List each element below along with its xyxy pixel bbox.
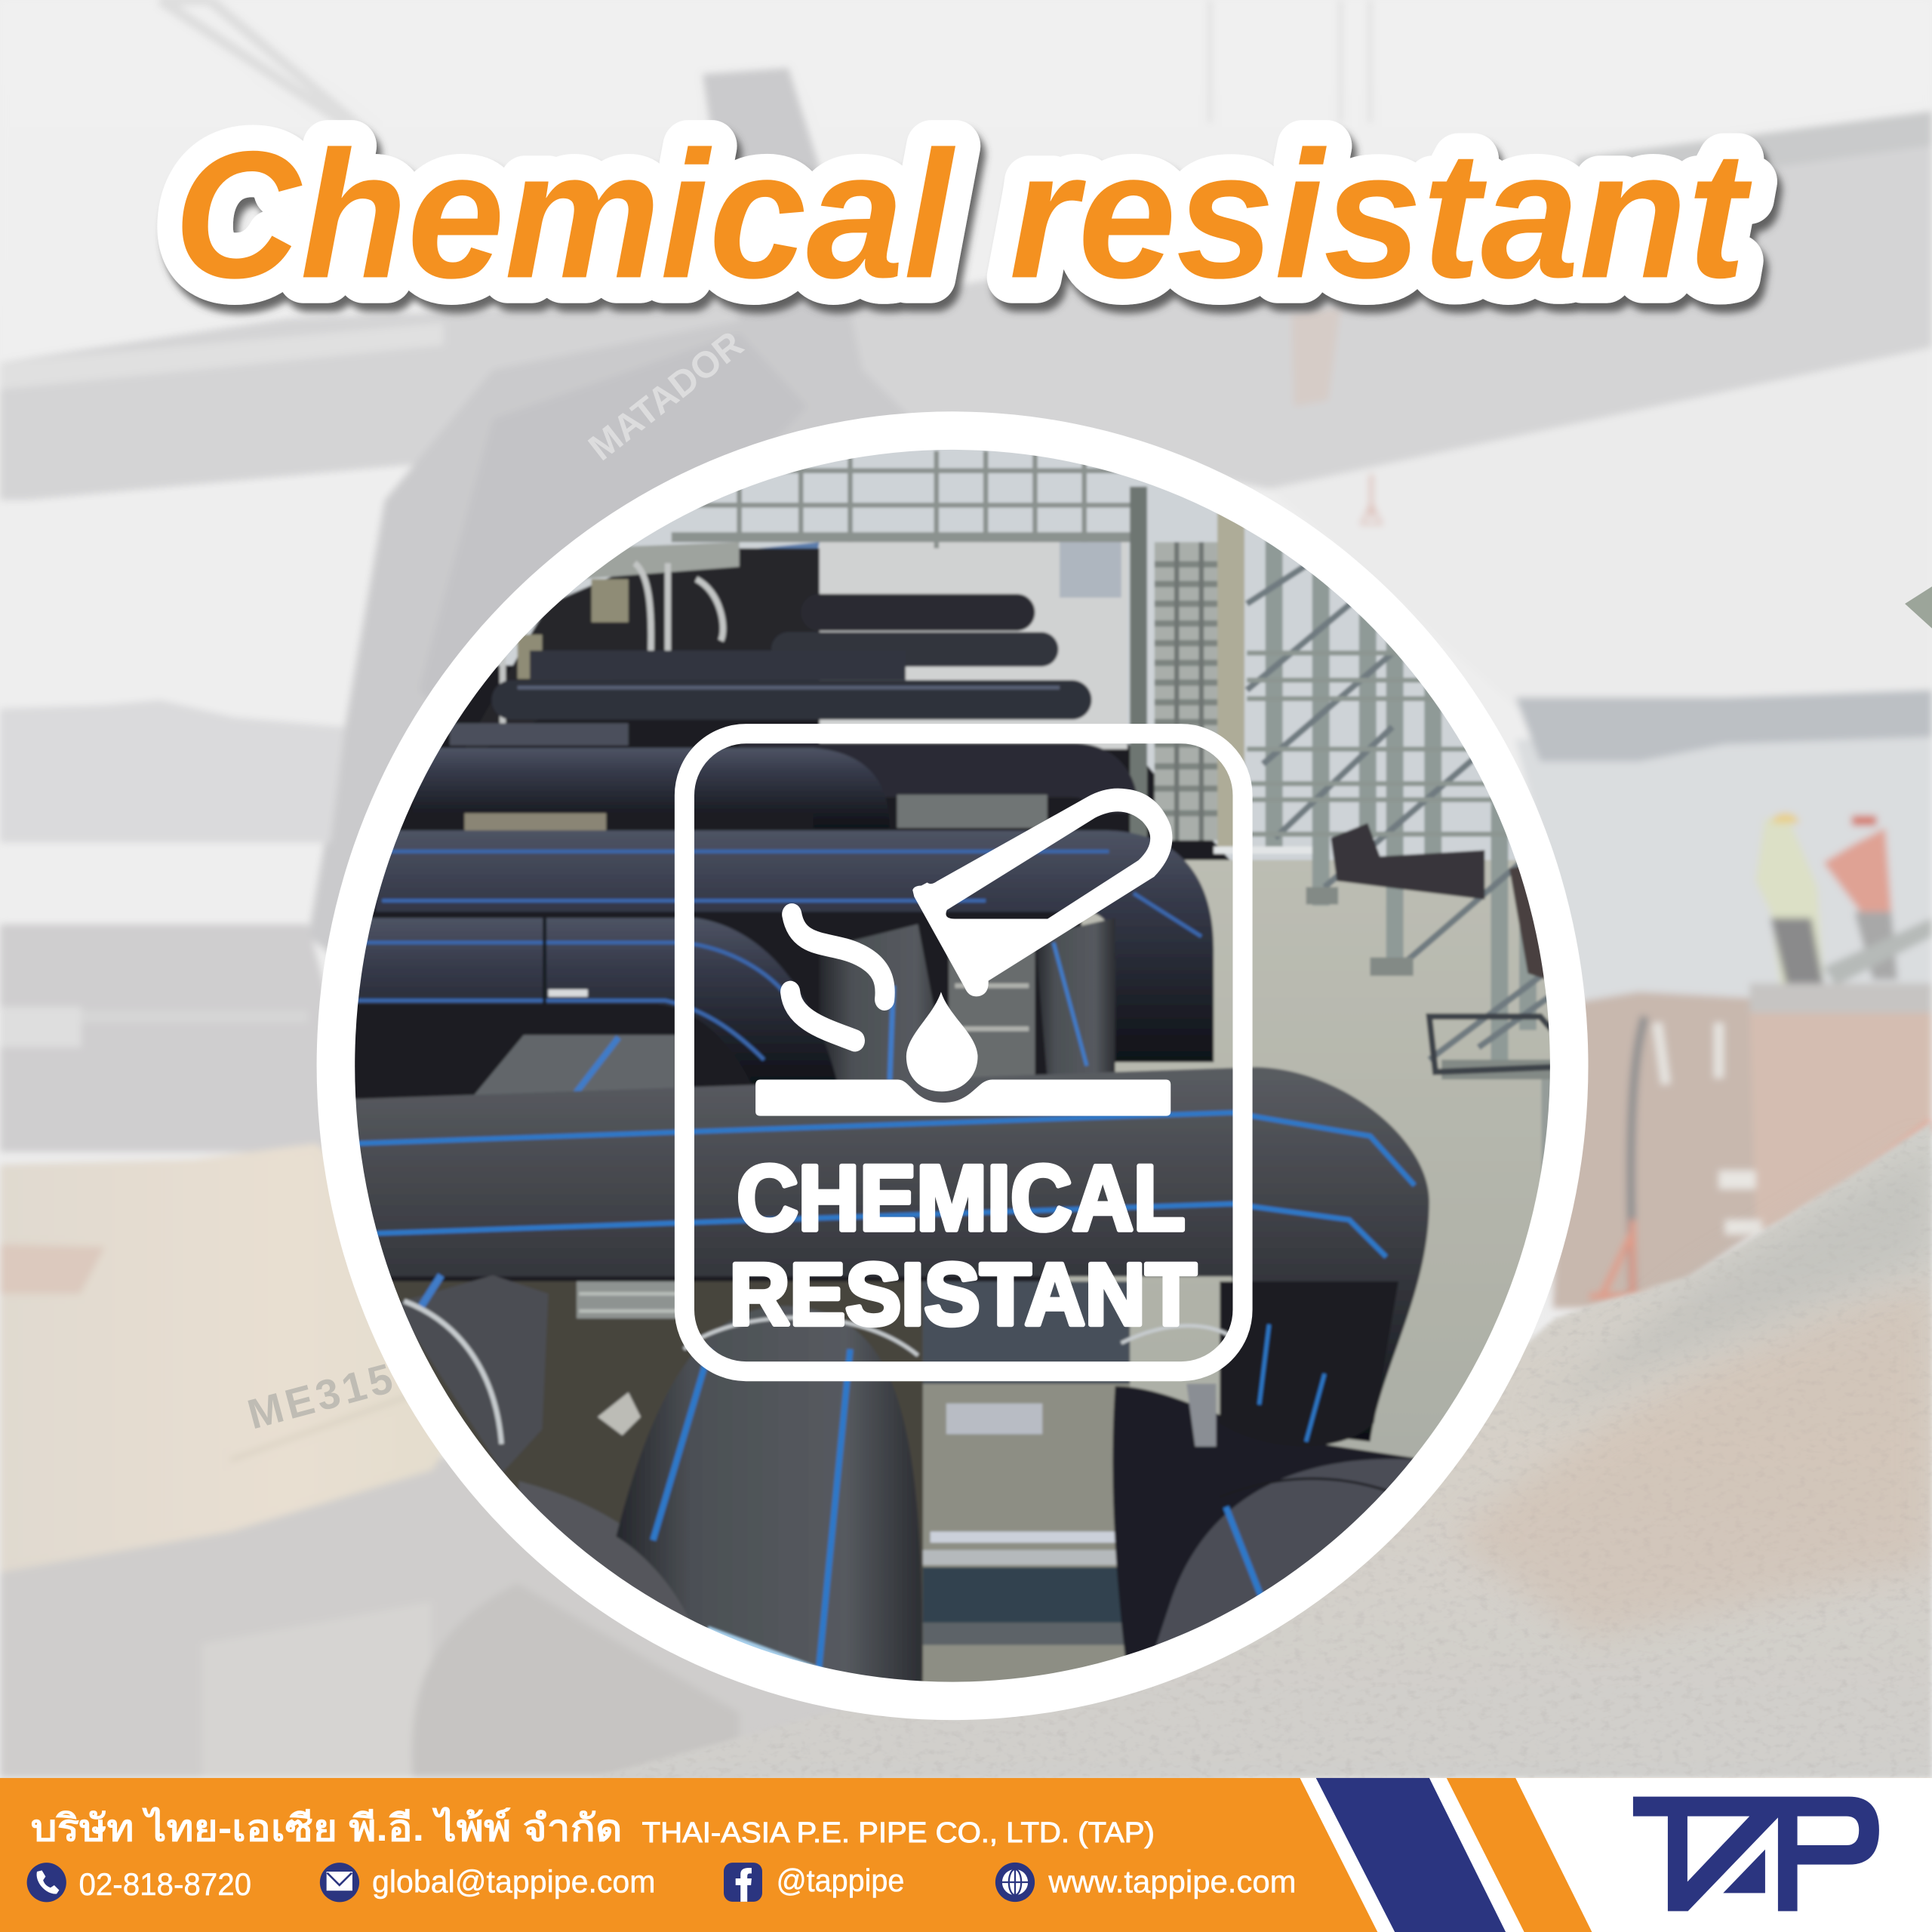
gravel gray band: [1527, 1146, 1932, 1417]
badge text: resistant: RESISTANT: [730, 1245, 1196, 1343]
title outline with shadow: resistant: [1009, 113, 1752, 315]
scaffold group: [1139, 487, 1577, 1306]
icon: facebook: [724, 1863, 762, 1902]
photo base: sky: [345, 444, 1564, 1688]
lower right pipe tee: [1112, 1386, 1437, 1675]
excavator arm centre: [308, 68, 912, 986]
footer band: [0, 1778, 1932, 1932]
logo: TAP: [1633, 1797, 1879, 1911]
pipe row three: [376, 830, 1214, 1062]
sky opening: [820, 540, 1128, 749]
top-left dark platform: [456, 549, 820, 764]
walkway railing: [672, 451, 1140, 549]
icon: globe: [995, 1863, 1035, 1902]
right sky: [1269, 347, 1932, 709]
right water: [1515, 727, 1932, 1004]
email address: global@tappipe.com: [372, 1864, 656, 1900]
red hose: [1811, 1124, 1932, 1214]
columns: [1274, 530, 1527, 1060]
footer white stripes: [1300, 1778, 1524, 1932]
pipe bottom left small: [518, 1481, 709, 1688]
excavator yellow body: [0, 1143, 442, 1571]
website: www.tappipe.com: [1048, 1864, 1297, 1900]
pipe row four: [355, 918, 838, 1084]
pipe row two: [413, 748, 890, 828]
excavator brand: MATADOR: [581, 324, 751, 469]
platform top: [1749, 983, 1932, 1018]
icon: pouring beaker: [912, 789, 1172, 996]
leaf at right edge: [1905, 586, 1932, 629]
gap structure: [923, 1281, 1130, 1688]
vertical elbow base: [1220, 1281, 1398, 1446]
badge text: chemical: CHEMICAL: [737, 1146, 1186, 1249]
circle photo frame: [317, 411, 1588, 1720]
left treeline: [0, 700, 345, 843]
silver rails: [503, 563, 723, 727]
footer orange bar: [0, 1778, 1932, 1932]
pipe row two back: [740, 770, 1112, 814]
excavator label: ME315: [243, 1354, 401, 1438]
icon: phone: [27, 1863, 66, 1902]
workers: [1756, 814, 1823, 986]
footer navy stripe: [1316, 1778, 1506, 1932]
title fill: Chemical: [174, 113, 955, 315]
icon: drop: [906, 992, 978, 1091]
hook: [1291, 308, 1340, 407]
cables: [1210, 0, 1371, 123]
company name thai: บริษัท ไทย-เอเซีย พี.อี. ไพ้พ์ จำกัด: [31, 1806, 622, 1849]
large centre vertical pipe: [616, 1306, 922, 1688]
footer white logo area: [1515, 1778, 1932, 1932]
far pipes: [820, 601, 1017, 623]
crane lattice top left: [159, 0, 363, 122]
rail and debris: [1214, 847, 1312, 854]
panel: pipeline photo: [345, 444, 1583, 1688]
braces: [1247, 518, 1577, 1060]
gravel slope: [592, 1121, 1932, 1778]
centre gray pipes: [820, 924, 949, 1084]
light blue corner: [690, 1626, 835, 1688]
icon: splash curves: [790, 915, 885, 1041]
excavator cab: [0, 922, 323, 1155]
machine by wall: [1552, 992, 1756, 1309]
title fill: resistant: [1009, 113, 1752, 315]
machinery behind: [949, 949, 1035, 1084]
left sky window: [0, 500, 384, 927]
pipe lower left: [394, 1275, 549, 1472]
title: Chemical resistant: [174, 113, 1752, 315]
phone number: 02-818-8720: [78, 1866, 251, 1902]
horizontals: [1247, 653, 1552, 834]
icon: mail: [320, 1863, 359, 1902]
floor: [1048, 860, 1564, 1688]
lower-left gray base: [0, 1455, 842, 1778]
light arc: [1121, 1326, 1232, 1343]
big pipe elbow: [351, 1067, 1429, 1441]
big pipe blue stripes: [357, 1112, 1414, 1257]
title fill: [174, 113, 1752, 315]
tracks bottom left: [202, 1601, 431, 1778]
title outline with shadow: [174, 113, 1752, 315]
blue tarp: [758, 542, 820, 635]
pink wall right: [1749, 1013, 1932, 1238]
stair tower grid: [1155, 542, 1225, 840]
bridge deck: [0, 111, 1932, 503]
gray diagonal pipe: [471, 1035, 675, 1099]
company name english: THAI-ASIA P.E. PIPE CO., LTD. (TAP): [642, 1817, 1155, 1848]
icon: surface plate: [755, 1079, 1171, 1116]
lower ground: [345, 1281, 1232, 1688]
badge: chemical resistant icon: [685, 734, 1243, 1371]
rails under big pipe: [577, 1281, 690, 1318]
badge frame: [685, 734, 1243, 1371]
title outline with shadow: Chemical: [174, 113, 955, 315]
gravel reddish band: [1454, 1281, 1932, 1638]
base dark under pipes: [345, 666, 1232, 1306]
orange machine legs: [1589, 1220, 1675, 1297]
right treeline: [1515, 690, 1932, 761]
facebook handle: @tappipe: [777, 1863, 904, 1898]
rubble: [598, 1392, 641, 1435]
